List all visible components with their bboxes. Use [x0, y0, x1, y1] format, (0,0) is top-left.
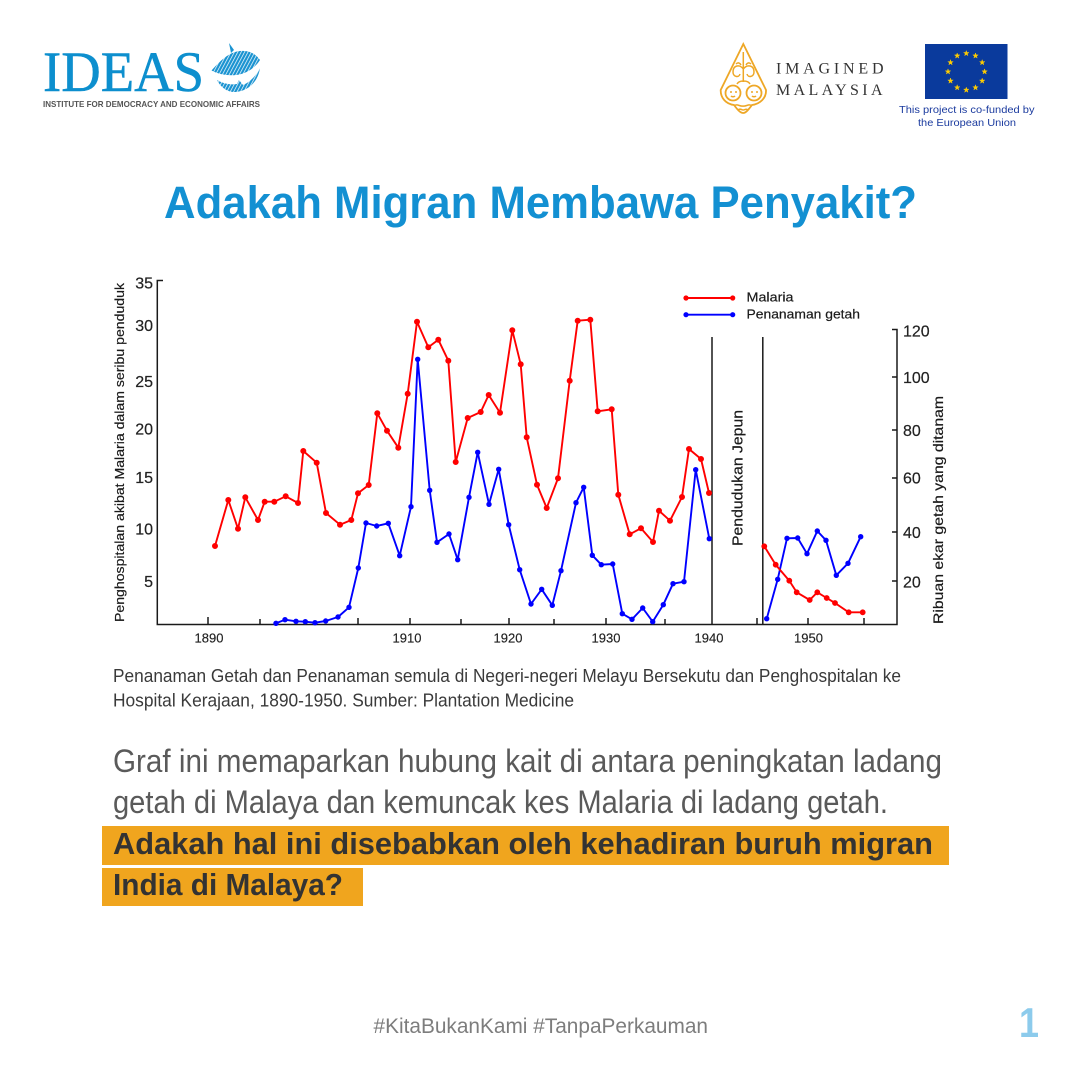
- highlight bar 2: [102, 868, 363, 906]
- left axis numbers: 20: [135, 422, 153, 438]
- footer hashtags: #KitaBukanKami #TanpaPerkauman: [374, 1015, 708, 1038]
- year labels: 1950: [794, 630, 823, 646]
- left axis numbers: 25: [135, 374, 153, 391]
- logo: Imagined Malaysia: [721, 44, 884, 113]
- right axis numbers: [903, 324, 930, 592]
- logo: European Union flag and credit: [899, 44, 1035, 129]
- left axis numbers: 30: [135, 318, 153, 335]
- series: malaria 1946-1955: [764, 546, 863, 612]
- series: malaria 1891-1940: [215, 320, 709, 546]
- series: rubber planting 1946-1955: [767, 531, 861, 619]
- right axis numbers: 120: [903, 324, 930, 340]
- series: rubber planting 1894-1940: [276, 359, 709, 623]
- title: Adakah Migran Membawa Penyakit?: [164, 177, 917, 228]
- icon: EU flag: [925, 44, 1008, 99]
- right axis numbers: 40: [903, 525, 921, 542]
- line chart: malaria and rubber planting: [112, 276, 946, 646]
- chart caption: [113, 666, 901, 710]
- year labels: 1910: [393, 630, 421, 646]
- left axis numbers: 15: [135, 470, 153, 487]
- EU credit text: [899, 104, 1035, 129]
- IDEAS wordmark: IDEAS: [43, 41, 204, 104]
- body paragraph: [113, 743, 942, 820]
- MALAYSIA text: MALAYSIA: [776, 82, 883, 99]
- left axis numbers: 10: [135, 522, 153, 538]
- body paragraph: Graf ini memaparkan hubung kait di antara peningkatan ladang: [113, 743, 942, 779]
- highlight bar 1: [102, 826, 949, 865]
- EU credit text: This project is co-funded by: [899, 104, 1035, 116]
- right axis numbers: 60: [903, 470, 921, 488]
- right axis numbers: 20: [903, 574, 921, 592]
- year labels: 1930: [592, 630, 620, 646]
- page number: 1: [1019, 999, 1039, 1046]
- left axis title: Penghospitalan akibat Malaria dalam seribu penduduk: [112, 282, 127, 622]
- left axis numbers: [135, 276, 153, 591]
- question text: [113, 826, 933, 902]
- right axis title: Ribuan ekar getah yang ditanam: [930, 396, 946, 624]
- IMAGINED text: IMAGINED: [776, 60, 884, 78]
- occupation boundary lines: [712, 337, 763, 625]
- year labels: [195, 630, 823, 646]
- chart axes: [157, 280, 897, 624]
- question text: India di Malaya?: [113, 867, 343, 902]
- year labels: 1890: [195, 630, 223, 646]
- occupation label: Pendudukan Jepun: [730, 410, 746, 546]
- legend: rubber planting: Penanaman getah: [746, 306, 860, 322]
- icon: IDEAS bird: [212, 43, 260, 92]
- chart caption: Hospital Kerajaan, 1890-1950. Sumber: Plantation Medicine: [113, 690, 574, 710]
- IDEAS subtitle: INSTITUTE FOR DEMOCRACY AND ECONOMIC AFFAIRS: [43, 99, 260, 109]
- legend: malaria: Malaria: [746, 290, 794, 304]
- left axis numbers: 5: [144, 574, 153, 591]
- right axis numbers: 100: [903, 370, 930, 387]
- left axis numbers: 35: [135, 276, 153, 292]
- year labels: 1920: [494, 630, 522, 646]
- logo: IDEAS: [43, 41, 260, 109]
- icon: gold wayang motif: [721, 44, 766, 113]
- legend: [686, 290, 860, 322]
- EU credit text: the European Union: [918, 117, 1016, 129]
- question text: Adakah hal ini disebabkan oleh kehadiran buruh migran: [113, 826, 933, 861]
- year labels: 1940: [695, 630, 723, 646]
- chart caption: Penanaman Getah dan Penanaman semula di Negeri-negeri Melayu Bersekutu dan Penghospitalan ke: [113, 666, 901, 686]
- right axis numbers: 80: [903, 423, 921, 440]
- legend: malaria: [686, 290, 794, 304]
- highlighted question: [102, 826, 949, 906]
- body paragraph: getah di Malaya dan kemuncak kes Malaria di ladang getah.: [113, 784, 888, 820]
